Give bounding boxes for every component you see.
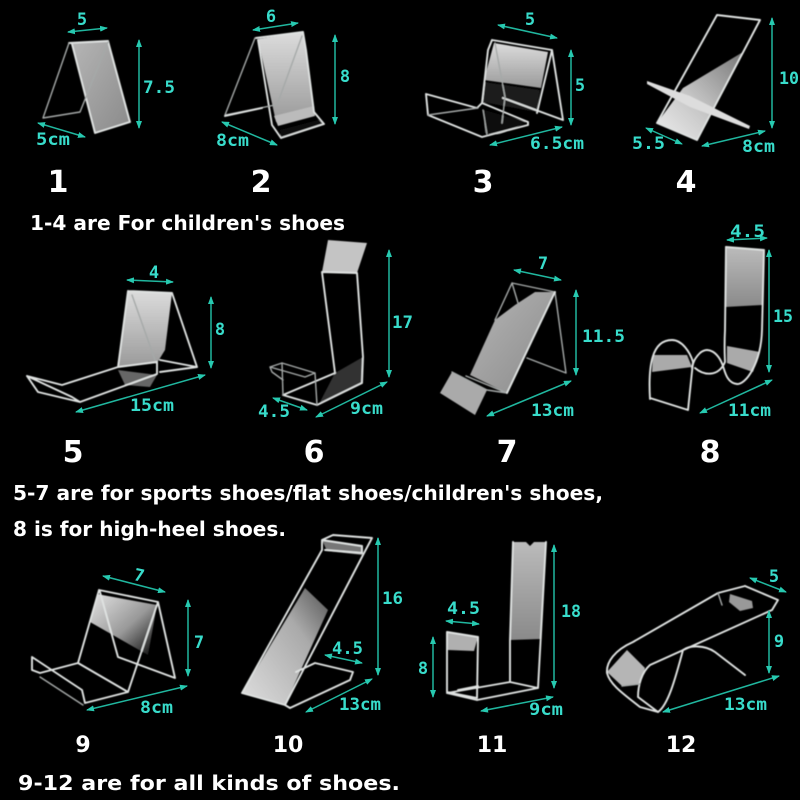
dimensions 6: 4.5 <box>258 402 290 422</box>
dimensions 6: 9cm <box>350 399 383 419</box>
number 8: 8 <box>700 435 720 470</box>
dimensions 1: 5cm <box>36 130 70 150</box>
dimensions 1: 5 <box>77 10 87 30</box>
stand 1 <box>43 41 130 133</box>
dimensions 2: 8 <box>340 67 350 87</box>
number 2: 2 <box>251 165 271 200</box>
dimensions 11: 8 <box>418 659 428 679</box>
dimensions 10 <box>306 538 403 715</box>
dimensions 12: 9 <box>774 632 784 652</box>
dimensions 10: 16 <box>382 589 403 609</box>
stand 10 <box>242 535 372 708</box>
dimensions 8: 15 <box>773 307 793 327</box>
number 12: 12 <box>666 733 696 758</box>
dimensions 7: 7 <box>538 254 548 274</box>
stand 9 <box>32 590 175 705</box>
dimensions 6: 17 <box>392 313 413 333</box>
dimensions 9: 7 <box>132 565 146 587</box>
dimensions 8 <box>700 222 793 421</box>
item 1 <box>36 10 175 200</box>
dimensions 1 <box>36 10 175 150</box>
item 8 <box>650 222 793 470</box>
item 3 <box>426 10 585 200</box>
dimensions 11: 4.5 <box>447 599 480 619</box>
stand 12 <box>607 586 778 712</box>
dimensions 11: 9cm <box>529 700 563 720</box>
dimensions 2: 6 <box>266 7 276 27</box>
dimensions 7: 11.5 <box>582 327 625 347</box>
dimensions 1: 7.5 <box>143 78 175 98</box>
dimensions 7: 13cm <box>531 401 574 421</box>
caption 8: 8 is for high-heel shoes. <box>13 517 286 541</box>
dimensions 12: 5 <box>769 567 779 587</box>
dimensions 11 <box>418 545 581 720</box>
number 6: 6 <box>304 435 324 470</box>
stand 6 <box>270 240 367 405</box>
caption 5-7: 5-7 are for sports shoes/flat shoes/children's shoes, <box>13 481 603 505</box>
dimensions 3: 5 <box>575 76 585 96</box>
stand 4 <box>647 15 760 140</box>
number 3: 3 <box>473 165 493 200</box>
dimensions 2: 8cm <box>216 131 249 151</box>
dimensions 5: 4 <box>149 263 159 283</box>
dimensions 10: 4.5 <box>332 639 363 659</box>
dimensions 9: 7 <box>194 633 204 653</box>
number 1: 1 <box>48 165 68 200</box>
dimensions 3 <box>490 10 585 154</box>
stand 3 <box>426 40 563 137</box>
caption 9-12: 9-12 are for all kinds of shoes. <box>18 771 400 795</box>
dimensions 4: 5.5 <box>632 134 665 154</box>
dimensions 12 <box>663 567 786 715</box>
caption 1-4: 1-4 are For children's shoes <box>30 211 345 235</box>
item 10 <box>242 535 403 758</box>
dimensions 5 <box>76 263 225 416</box>
dimensions 2 <box>216 7 350 151</box>
dimensions 12: 13cm <box>724 695 767 715</box>
number 4: 4 <box>676 165 696 200</box>
item 7 <box>440 254 625 470</box>
stand 8 <box>650 247 764 410</box>
number 11: 11 <box>477 733 507 758</box>
number 5: 5 <box>63 435 83 470</box>
number 9: 9 <box>75 733 91 758</box>
dimensions 4: 8cm <box>742 137 775 157</box>
stand 5 <box>27 291 197 402</box>
item 12 <box>607 567 786 758</box>
dimensions 3: 6.5cm <box>530 134 584 154</box>
dimensions 9 <box>87 565 204 718</box>
item 4 <box>632 15 799 200</box>
item 6 <box>258 240 413 470</box>
number 7: 7 <box>497 435 517 470</box>
dimensions 11: 18 <box>561 602 581 622</box>
dimensions 3: 5 <box>525 10 535 30</box>
dimensions 6 <box>258 250 413 422</box>
item 5 <box>27 263 225 470</box>
stand 11 <box>447 542 546 700</box>
stand 7 <box>440 283 566 415</box>
item 11 <box>418 542 581 758</box>
dimensions 7 <box>487 254 625 421</box>
dimensions 10: 13cm <box>339 695 381 715</box>
dimensions 5: 15cm <box>130 396 174 416</box>
dimensions 8: 4.5 <box>730 222 765 242</box>
dimensions 8: 11cm <box>728 401 771 421</box>
dimensions 5: 8 <box>215 320 225 340</box>
stand 2 <box>225 32 324 138</box>
dimensions 9: 8cm <box>140 698 173 718</box>
item 2 <box>216 7 350 200</box>
number 10: 10 <box>273 733 303 758</box>
dimensions 4 <box>632 18 799 157</box>
item 9 <box>32 565 204 758</box>
dimensions 4: 10 <box>779 69 799 89</box>
